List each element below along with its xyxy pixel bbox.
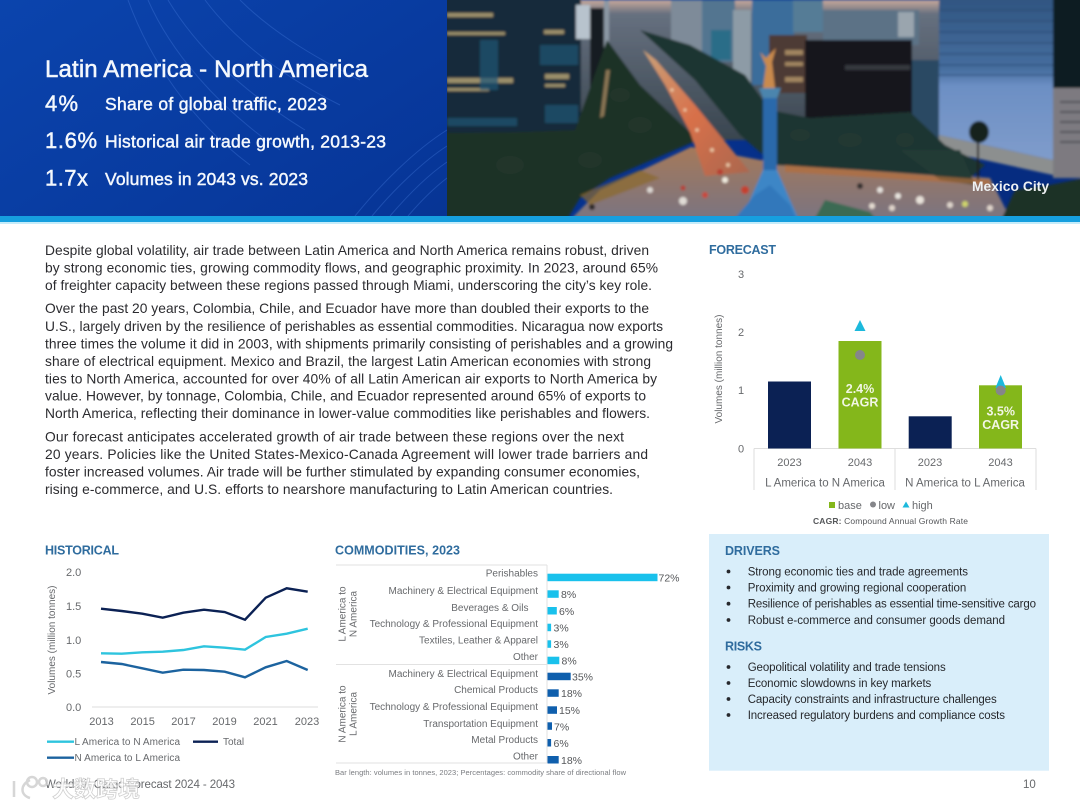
- y axis: [714, 269, 744, 456]
- paragraph 3: Our forecast anticipates accelerated growth of air trade between these regions over the next: [45, 430, 624, 445]
- y axis: Volumes (million tonnes): [47, 586, 58, 694]
- percentage labels: 18%: [561, 755, 582, 767]
- stat: historical growth: 1.6%: [45, 128, 97, 153]
- accent band under header: [0, 216, 1080, 224]
- category labels: Metal Products: [471, 735, 538, 746]
- legend: L America to N America: [74, 737, 180, 748]
- CAGR labels: [842, 382, 1019, 432]
- paragraph 2: U.S., largely driven by the resilience of perishables as essential commodities. Nicaragua now exports: [45, 319, 663, 334]
- category labels: 2043: [848, 457, 872, 469]
- title: Latin America - North America: [45, 56, 369, 83]
- risks list: Capacity constraints and infrastructure challenges: [748, 694, 997, 706]
- high and low markers: [854, 320, 1006, 396]
- CAGR labels: 2.4%: [846, 382, 874, 396]
- percentage labels: [554, 572, 680, 767]
- category labels: Transportation Equipment: [423, 719, 538, 730]
- category labels: Machinery & Electrical Equipment: [388, 669, 538, 680]
- percentage labels: 6%: [559, 606, 574, 618]
- risks list: Increased regulatory burdens and compliance costs: [748, 710, 1005, 722]
- page number: 10: [1023, 779, 1036, 791]
- paragraph 2: Over the past 20 years, Colombia, Chile, and Ecuador have more than doubled their exports to the: [45, 301, 649, 316]
- bars: [768, 341, 1022, 448]
- y axis: 1: [738, 385, 744, 397]
- category labels: Technology & Professional Equipment: [370, 619, 538, 630]
- stat: historical growth: Historical air trade growth, 2013-23: [105, 132, 386, 152]
- percentage labels: 3%: [554, 639, 569, 651]
- CAGR note: CAGR: Compound Annual Growth Rate: [813, 516, 968, 526]
- group label: L America to N America: N America: [348, 591, 360, 637]
- paragraph 3: foster increased volumes. Air trade will be further stimulated by expanding consumer economies,: [45, 464, 640, 480]
- paragraph 2: [45, 301, 673, 421]
- watermark: [14, 777, 140, 802]
- Angel of Independence column: [735, 48, 798, 218]
- percentage labels: 3%: [554, 622, 569, 634]
- body text: [45, 243, 673, 497]
- glass tower at left: [440, 0, 609, 134]
- category labels: Technology & Professional Equipment: [370, 702, 538, 713]
- category labels: Textiles, Leather & Apparel: [419, 636, 538, 646]
- percentage labels: 6%: [554, 738, 569, 750]
- y axis: 0.0: [66, 702, 81, 714]
- paragraph 2: share of electrical equipment. Mexico and Brazil, the largest Latin American economies with strong: [45, 354, 651, 369]
- right glass tower: [939, 0, 1053, 160]
- avenue trees: [440, 40, 698, 218]
- legend: Total: [223, 737, 244, 748]
- category labels: Other: [513, 752, 539, 762]
- group label: N America to L America: N America to: [338, 685, 348, 743]
- paragraph 3: rising e-commerce, and U.S. efforts to nearshore manufacturing to Latin American countries.: [45, 482, 613, 497]
- header banner background: [0, 0, 1080, 216]
- CAGR labels: CAGR: [842, 396, 878, 410]
- x axis: [89, 716, 319, 728]
- tree texture: [496, 88, 914, 174]
- x axis: 2023: [295, 716, 319, 728]
- CAGR labels: 3.5%: [986, 404, 1015, 418]
- percentage labels: 8%: [561, 589, 576, 601]
- line: total: [101, 588, 308, 620]
- x axis: 2013: [89, 716, 114, 728]
- heading: drivers: DRIVERS: [725, 544, 780, 558]
- stat: volumes multiple: Volumes in 2043 vs. 2023: [105, 169, 308, 189]
- paragraph 2: three times the volume it did in 2003, with shipments primarily consisting of perishables and a growing: [45, 336, 673, 351]
- y axis: 1.0: [66, 635, 81, 647]
- legend: high: [912, 500, 933, 512]
- stat: share of global traffic: Share of global traffic, 2023: [105, 94, 327, 114]
- percentage labels: 35%: [572, 672, 593, 684]
- palm tree: [969, 121, 989, 180]
- line: L America to N America: [101, 629, 308, 654]
- category labels: [370, 568, 539, 762]
- group label: N America to L America: [338, 685, 360, 743]
- x axis: 2015: [130, 716, 155, 728]
- drivers list: Strong economic ties and trade agreements: [748, 566, 968, 578]
- CAGR labels: CAGR: [982, 418, 1019, 432]
- photo: Mexico City skyline with Angel of Independence: [440, 0, 1080, 218]
- orange tree line: [580, 170, 660, 205]
- stat: volumes multiple: [45, 166, 308, 190]
- bars: L America to N America: [548, 574, 658, 664]
- forecast bar chart: [714, 269, 1036, 526]
- heading: commodities: COMMODITIES, 2023: [335, 544, 460, 558]
- y axis: 0: [738, 444, 744, 456]
- plaza and streets: [572, 147, 1010, 218]
- category labels: Perishables: [486, 568, 538, 580]
- group label: L America to N America: [338, 586, 360, 642]
- category labels: 2023: [777, 457, 802, 469]
- key stats: [45, 91, 386, 190]
- category labels: 2043: [988, 457, 1013, 469]
- percentage labels: 72%: [658, 572, 680, 584]
- risks list: Economic slowdowns in key markets: [748, 678, 932, 690]
- percentage labels: 15%: [559, 705, 580, 717]
- cars: [589, 169, 993, 211]
- watermark: 大数跨境: [52, 777, 140, 802]
- category labels: 2023: [918, 457, 942, 469]
- photo caption: Mexico City: [972, 179, 1049, 194]
- category labels: N America to L America: [905, 478, 1025, 490]
- paragraph 1: by strong economic ties, growing commodity flows, and geographic proximity. In 2023, around 65%: [45, 261, 658, 276]
- risks list: Geopolitical volatility and trade tensions: [748, 662, 946, 674]
- footer source: World Air Cargo Forecast 2024 - 2043: [45, 779, 235, 791]
- paragraph 2: North America, reflecting their dominance in lower-value commodities like perishables and flowers.: [45, 406, 650, 421]
- x axis: 2019: [212, 716, 237, 728]
- y axis: Volumes (million tonnes): [714, 315, 725, 423]
- drivers list: Resilience of perishables as essential time-sensitive cargo: [748, 599, 1036, 611]
- drivers list: Proximity and growing regional cooperation: [748, 582, 966, 594]
- paragraph 1: Despite global volatility, air trade between Latin America and North America remains robust, driven: [45, 243, 649, 258]
- stat: share of global traffic: [45, 91, 327, 116]
- illuminated avenue traffic: [643, 50, 750, 176]
- category labels: Beverages & Oils: [451, 603, 528, 614]
- percentage labels: 18%: [561, 688, 582, 700]
- paragraph 2: ties to North America, accounted for over 40% of all Latin American air exports to North America by: [45, 371, 657, 386]
- category labels: [765, 457, 1025, 490]
- legend: [829, 500, 933, 512]
- heading: risks: RISKS: [725, 640, 762, 654]
- legend: low: [878, 500, 895, 512]
- legend: N America to L America: [74, 753, 180, 764]
- stat: volumes multiple: 1.7x: [45, 166, 88, 190]
- sky and distant haze: [578, 0, 942, 142]
- category labels: Machinery & Electrical Equipment: [388, 586, 538, 597]
- percentage labels: 7%: [554, 722, 569, 734]
- stat: share of global traffic: 4%: [45, 91, 78, 116]
- category labels: L America to N America: [765, 478, 885, 490]
- x axis: 2017: [171, 716, 196, 728]
- mid-distance towers: [670, 0, 940, 138]
- line: N America to L America: [101, 661, 308, 677]
- legend: base: [838, 500, 862, 512]
- paragraph 3: [45, 430, 648, 497]
- paragraph 3: 20 years. Policies like the United States-Mexico-Canada Agreement will lower trade barriers and: [45, 447, 648, 462]
- x axis: 2021: [253, 716, 278, 728]
- legend: [47, 737, 244, 764]
- category labels: Chemical Products: [454, 685, 538, 696]
- y axis: [47, 567, 81, 714]
- group label: N America to L America: L America: [348, 692, 360, 736]
- y axis: 3: [738, 269, 744, 281]
- stat: historical growth: [45, 128, 386, 153]
- category labels: Other: [513, 652, 539, 663]
- bars: N America to L America: [548, 673, 571, 764]
- paragraph 1: [45, 243, 658, 293]
- commodities bar chart: [335, 565, 680, 777]
- chart footnote: Bar length: volumes in tonnes, 2023; Percentages: commodity share of directional flow: [335, 768, 627, 777]
- heading: historical: HISTORICAL: [45, 544, 119, 558]
- risks list: [727, 662, 1005, 722]
- panel: drivers and risks: [709, 534, 1049, 771]
- percentage labels: 8%: [562, 656, 577, 668]
- y axis: 2.0: [66, 567, 81, 579]
- paragraph 2: value. However, by tonnage, Colombia, Chile, and Ecuador represented around 65% of exports to: [45, 389, 646, 404]
- y axis: 1.5: [66, 601, 81, 613]
- drivers list: Robust e-commerce and consumer goods demand: [748, 615, 1005, 627]
- heading: forecast: FORECAST: [709, 243, 776, 257]
- drivers list: [727, 566, 1036, 627]
- y axis: 0.5: [66, 668, 81, 680]
- group label: L America to N America: L America to: [338, 586, 348, 642]
- historical line chart: [47, 567, 319, 764]
- y axis: 2: [738, 327, 744, 339]
- paragraph 1: of freighter capacity between these regions passed through Miami, underscoring the city’s key role.: [45, 278, 652, 293]
